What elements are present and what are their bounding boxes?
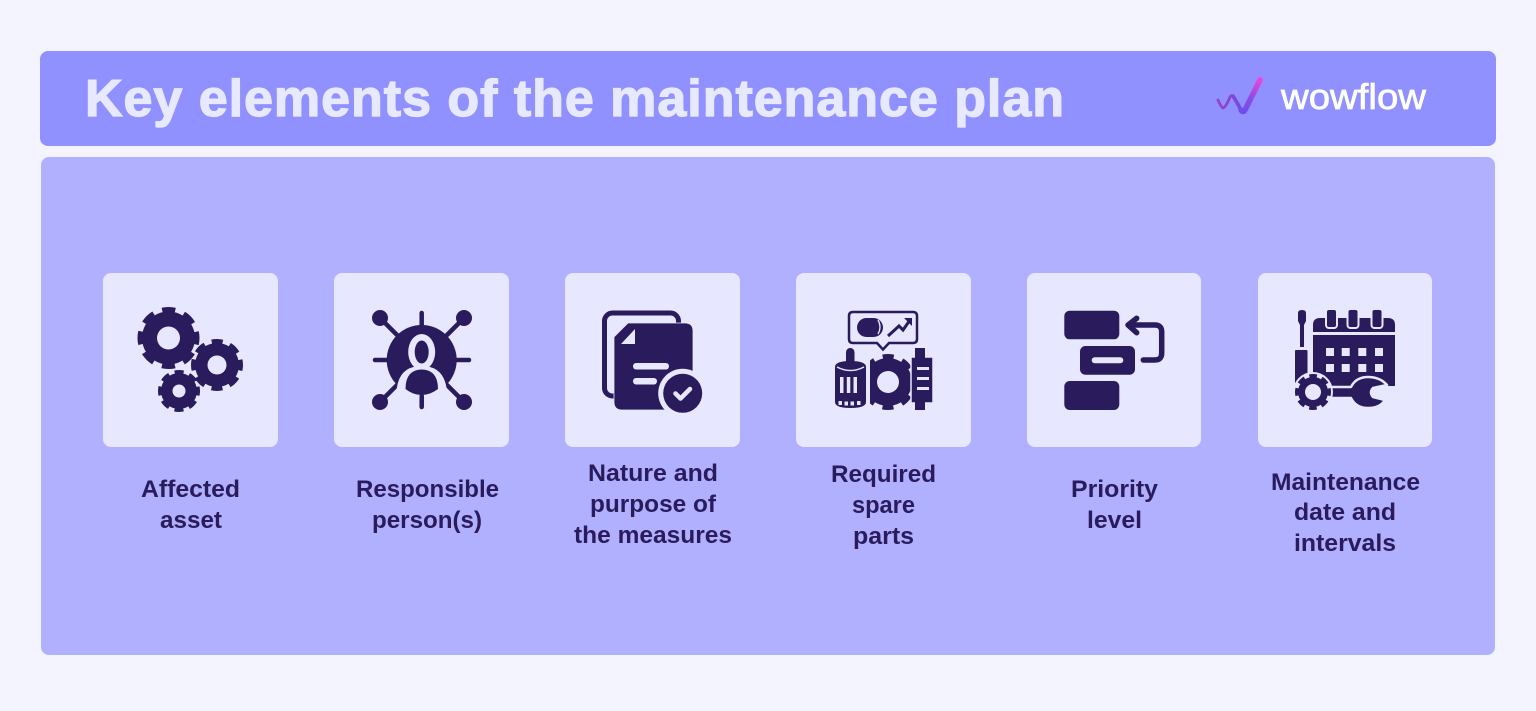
label (1071, 476, 1159, 534)
label: date and (1294, 499, 1396, 526)
label: Maintenance (1271, 469, 1420, 496)
item: required spare parts (796, 273, 971, 550)
item: affected asset (103, 273, 278, 534)
icon: gears (140, 310, 240, 410)
main panel (41, 157, 1495, 655)
icon: priority flow (1064, 311, 1162, 410)
icon: documents with check (604, 313, 707, 418)
label (574, 460, 732, 549)
label: intervals (1294, 530, 1396, 557)
title: Key elements of the maintenance plan (85, 70, 1064, 128)
label (1271, 469, 1420, 557)
label: Responsible (356, 476, 499, 503)
icon: calendar and tools (1293, 309, 1397, 412)
item: nature and purpose (565, 273, 740, 549)
card (103, 273, 278, 447)
item: priority level (1027, 273, 1201, 534)
card (334, 273, 509, 447)
logo mark (1218, 80, 1260, 112)
item: responsible persons (334, 273, 509, 534)
label: purpose of (590, 491, 717, 518)
label: level (1087, 507, 1142, 534)
label (356, 476, 499, 534)
card (1258, 273, 1432, 447)
card (796, 273, 971, 447)
label: spare (852, 492, 915, 519)
item: maintenance date (1258, 273, 1432, 557)
label (831, 461, 936, 550)
label (141, 476, 240, 534)
label: Nature and (588, 460, 718, 487)
label: Priority (1071, 476, 1159, 503)
logo: wowflow (1218, 76, 1427, 117)
card (1027, 273, 1201, 447)
header banner (40, 51, 1496, 146)
label: the measures (574, 522, 732, 549)
logo wordmark: wowflow (1280, 76, 1427, 117)
label: Affected (141, 476, 240, 503)
label: parts (853, 523, 914, 550)
label: person(s) (372, 507, 482, 534)
icon: person network (372, 310, 472, 410)
icon: spare parts (835, 312, 933, 410)
label: Required (831, 461, 936, 488)
label: asset (160, 507, 222, 534)
card (565, 273, 740, 447)
